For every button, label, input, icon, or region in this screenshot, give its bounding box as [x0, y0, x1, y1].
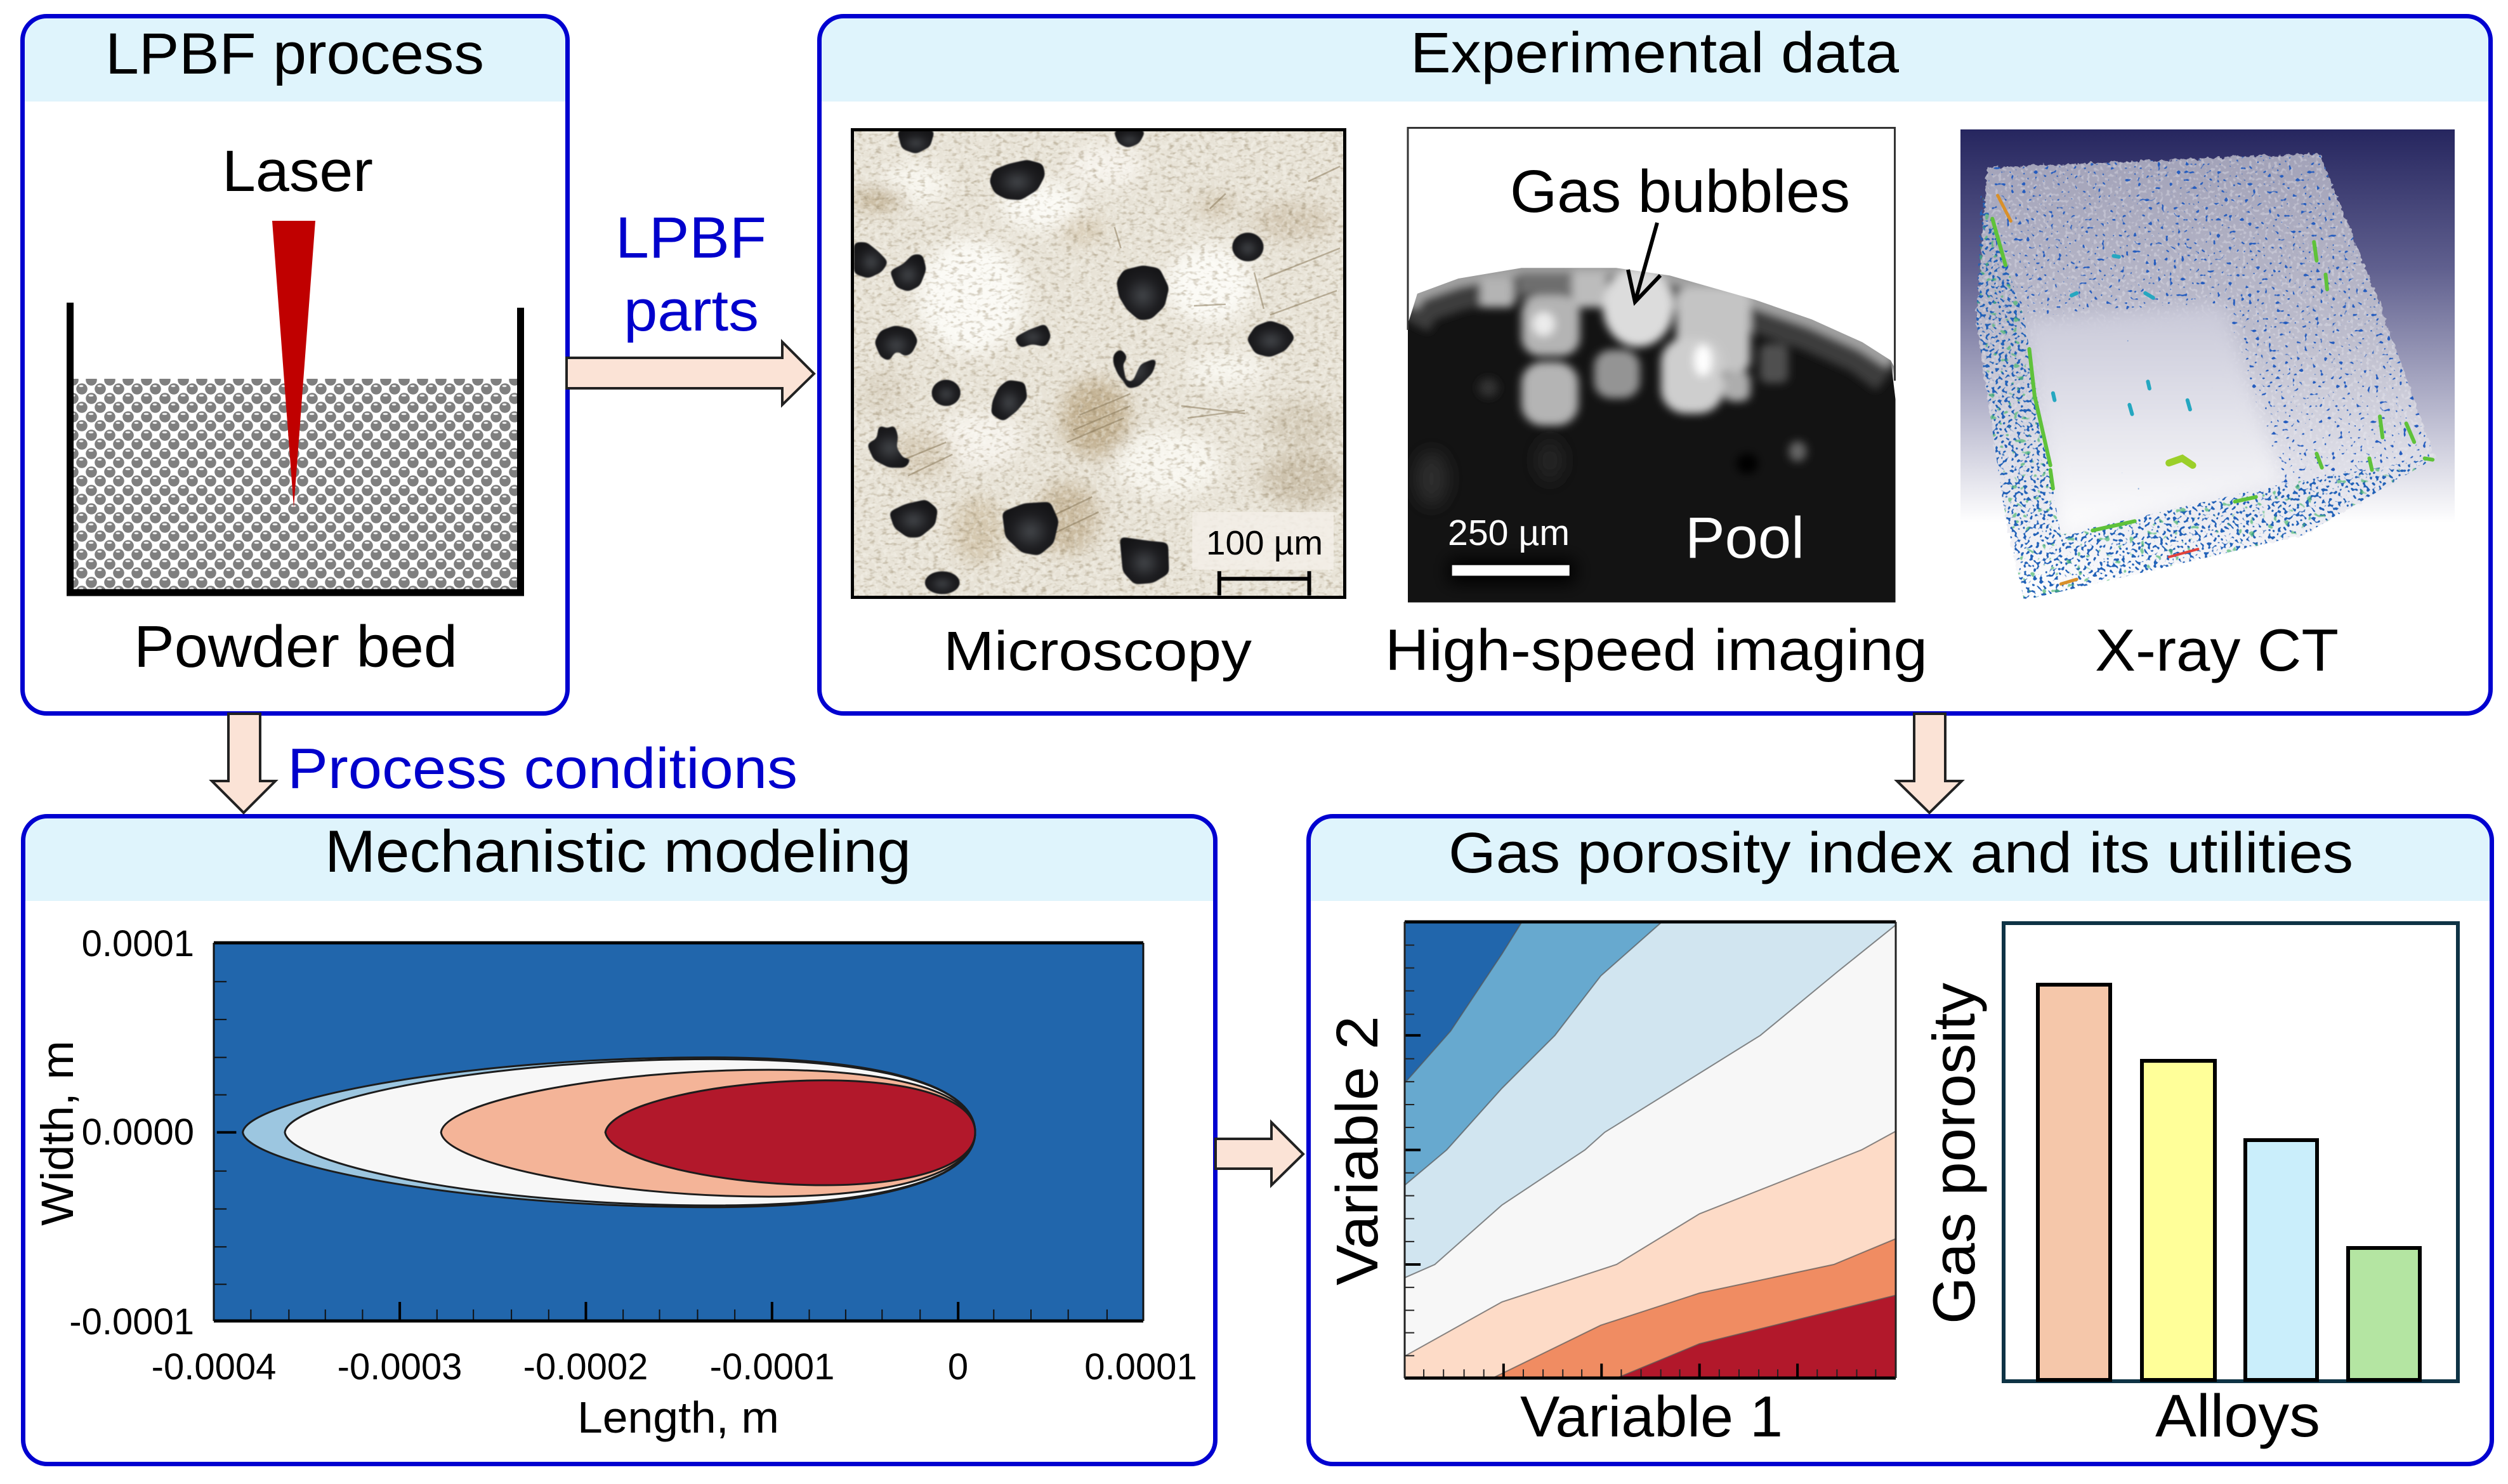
arrow: LPBF process to experimental data	[567, 342, 814, 405]
label: LPBF parts: parts	[624, 279, 759, 343]
image: high-speed imaging	[1408, 127, 1896, 603]
x-axis tick labels: 0.0001	[1084, 1346, 1197, 1388]
y-axis tick labels	[69, 923, 194, 1343]
axis title: Width, m: Width, m	[33, 1041, 83, 1226]
x-axis tick labels: -0.0004	[152, 1346, 276, 1388]
pore clusters	[1992, 195, 2432, 584]
axis ticks	[214, 982, 1107, 1321]
powder bed container	[70, 303, 520, 593]
label: X-ray CT: X-ray CT	[2095, 617, 2339, 683]
image: X-ray CT	[1960, 129, 2455, 600]
label: 250 µm: 250 µm	[1448, 513, 1570, 553]
arrow: points to gas bubble	[1628, 223, 1660, 302]
axis title: Alloys: Alloys	[2155, 1382, 2320, 1450]
arrow: mechanistic modeling to gas porosity index	[1216, 1122, 1303, 1185]
x-axis tick labels: 0	[948, 1346, 968, 1388]
bar 1	[2038, 985, 2110, 1380]
axis ticks	[1405, 945, 1875, 1378]
label: Gas bubbles: Gas bubbles	[1510, 158, 1850, 225]
y-axis tick labels: 0.0000	[82, 1112, 194, 1153]
y-axis tick labels: -0.0001	[69, 1301, 194, 1343]
y-axis tick labels: 0.0001	[82, 923, 194, 964]
x-axis tick labels	[152, 1346, 1197, 1388]
bar 4	[2348, 1248, 2420, 1380]
contour plot: variable 1 vs variable 2	[1405, 922, 1896, 1378]
bar chart: gas porosity by alloy	[2004, 923, 2458, 1381]
panel: Mechanistic modeling	[23, 816, 1216, 1464]
label: Powder bed: Powder bed	[134, 614, 457, 680]
bar 3	[2245, 1140, 2317, 1380]
label: 100 µm: 100 µm	[1206, 524, 1323, 562]
frame	[853, 129, 1345, 598]
axis title: Variable 1: Variable 1	[1520, 1385, 1783, 1449]
label: Process conditions: Process conditions	[287, 737, 798, 801]
streak marks	[902, 166, 1340, 536]
arrow: experimental data to gas porosity index	[1897, 714, 1962, 813]
label: Pool: Pool	[1685, 506, 1804, 570]
heading: Experimental data: Experimental data	[1410, 22, 1900, 85]
contour plot: melt pool	[214, 943, 1143, 1321]
axis title: Length, m: Length, m	[577, 1393, 779, 1442]
x-axis tick labels: -0.0001	[710, 1346, 834, 1388]
heading: Gas porosity index and its utilities: Gas porosity index and its utilities	[1448, 822, 2353, 885]
gas pores	[854, 130, 1295, 594]
x-axis tick labels: -0.0002	[523, 1346, 648, 1388]
scale bar	[1219, 571, 1310, 596]
heading: Mechanistic modeling: Mechanistic modeling	[325, 818, 911, 884]
label: Laser: Laser	[222, 139, 373, 204]
icon: laser beam	[272, 221, 315, 508]
label: LPBF parts: LPBF	[615, 206, 766, 270]
x-axis tick labels: -0.0003	[338, 1346, 462, 1388]
panel: Experimental data	[820, 16, 2491, 713]
label: Microscopy: Microscopy	[943, 621, 1252, 682]
panel: Gas porosity index and its utilities	[1308, 816, 2492, 1464]
image: microscopy	[851, 128, 1346, 599]
panel: LPBF process	[23, 16, 567, 713]
scale box	[1192, 512, 1334, 570]
axis title: Variable 2: Variable 2	[1324, 1016, 1390, 1285]
heading: LPBF process: LPBF process	[105, 22, 484, 86]
label: LPBF parts	[615, 206, 766, 343]
arrow: LPBF process to mechanistic modeling	[212, 714, 275, 813]
axis title: Gas porosity: Gas porosity	[1920, 983, 1987, 1324]
bar 2	[2142, 1061, 2215, 1380]
label: High-speed imaging: High-speed imaging	[1385, 618, 1927, 683]
